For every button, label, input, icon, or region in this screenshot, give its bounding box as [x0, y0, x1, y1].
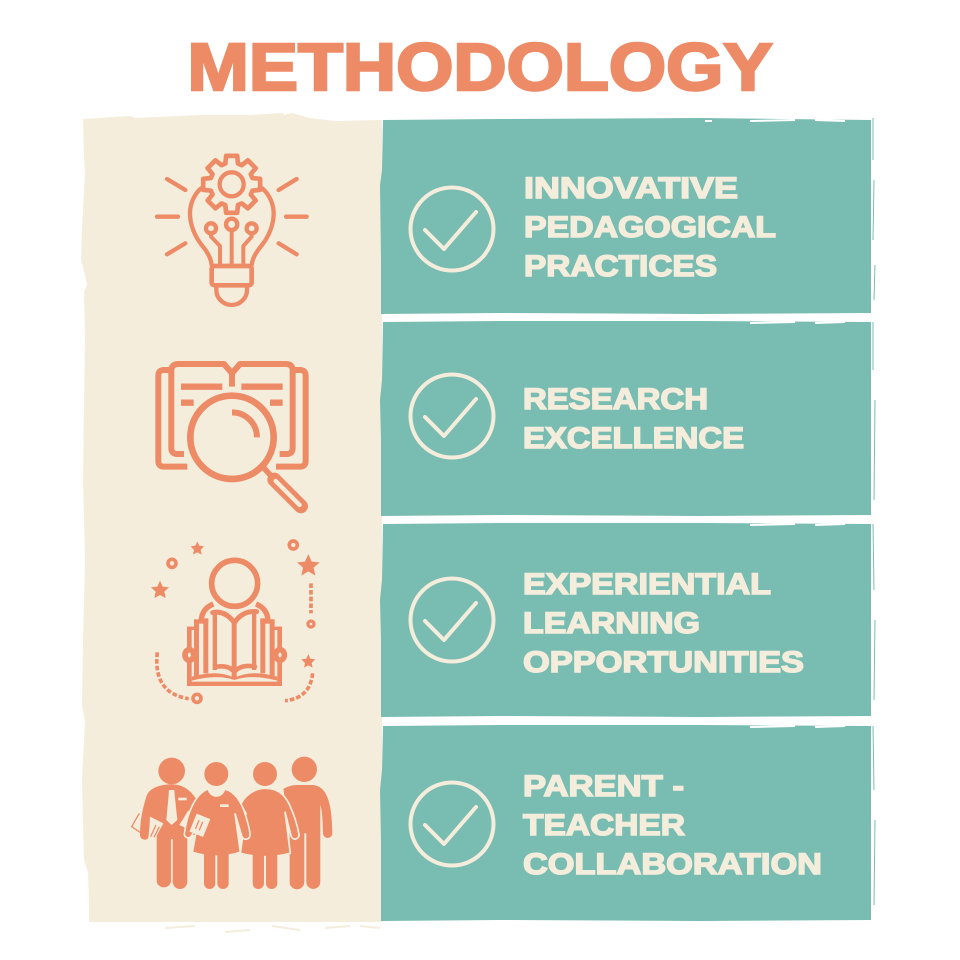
panel: row 2 research excellence: [380, 321, 871, 516]
row 1 background: [380, 118, 871, 314]
row 2 text: EXCELLENCE: [523, 422, 744, 455]
icon: check circle: [410, 782, 494, 866]
row 2 text: [523, 383, 744, 455]
icon: check circle: [410, 578, 494, 662]
row 4 text: PARENT -: [523, 770, 684, 803]
icon: reader with book and stars: [151, 541, 320, 702]
row 3 text: OPPORTUNITIES: [523, 646, 804, 679]
icon: check circle: [410, 374, 494, 458]
panel: beige icon column: [81, 113, 382, 922]
panel: row 1 innovative pedagogical practices: [380, 118, 871, 314]
icon: open book with magnifying glass: [158, 364, 306, 506]
panel: row 3 experiential learning opportunities: [380, 523, 871, 717]
row 3 text: LEARNING: [523, 607, 700, 640]
person 2: [184, 762, 250, 889]
row 2 background: [380, 321, 871, 516]
icon: check circle: [410, 188, 494, 270]
panel: row 4 parent teacher collaboration: [380, 725, 871, 921]
row 2 text: RESEARCH: [523, 383, 708, 416]
row 3 background: [380, 523, 871, 717]
person 1: [132, 758, 200, 889]
row 4 text: COLLABORATION: [523, 848, 822, 881]
icon: light bulb with gear: [157, 156, 307, 305]
person 4: [283, 757, 332, 889]
row 1 text: [524, 172, 776, 283]
row 1 text: PEDAGOGICAL: [524, 211, 776, 244]
row 4 text: TEACHER: [523, 809, 685, 842]
row 3 text: [523, 568, 804, 679]
icon: group of four people: [132, 757, 332, 889]
row 1 text: INNOVATIVE: [524, 172, 738, 205]
title: METHODOLOGY: [188, 30, 772, 105]
row 3 text: EXPERIENTIAL: [523, 568, 771, 601]
row 4 text: [523, 770, 822, 881]
person 3: [240, 762, 299, 889]
row 1 text: PRACTICES: [524, 250, 717, 283]
row 4 background: [380, 725, 871, 921]
